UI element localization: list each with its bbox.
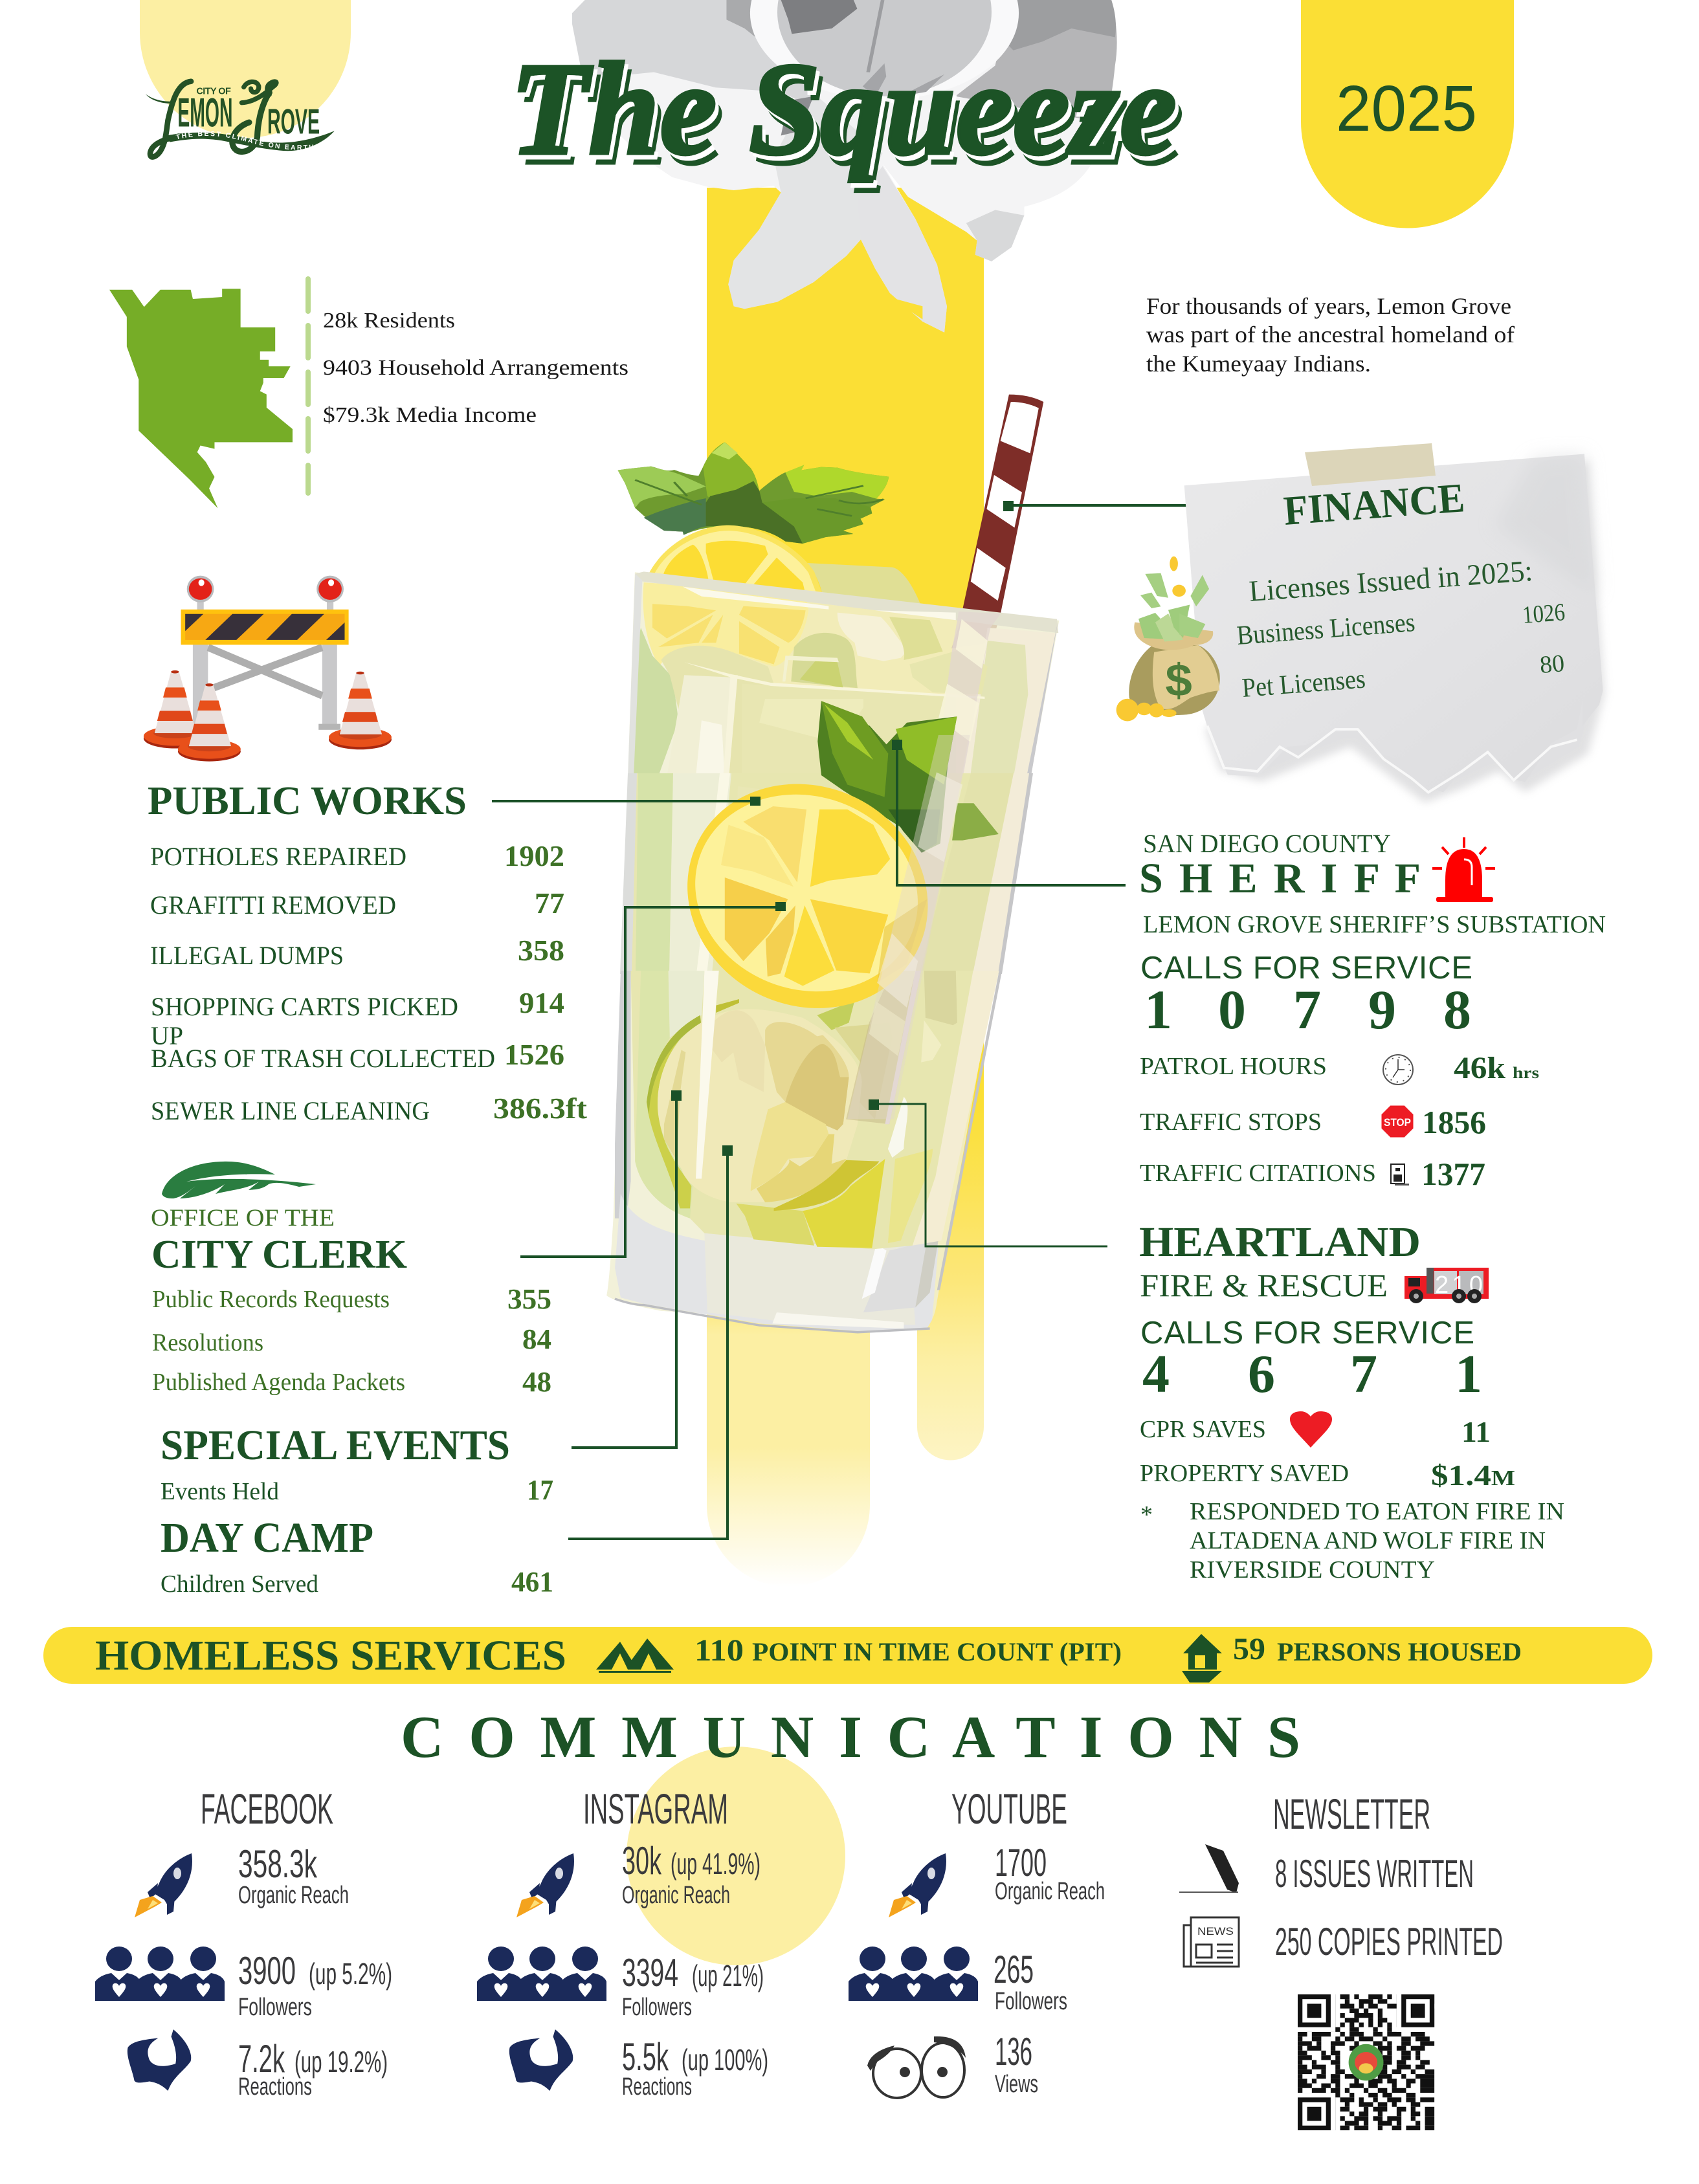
persons housed: 59 (1233, 1632, 1265, 1666)
straw top (951, 395, 1043, 648)
row: children served (161, 1566, 553, 1598)
licenses heading: Licenses Issued in 2025: (1248, 554, 1534, 608)
torn paper note (1184, 454, 1605, 803)
followers: 3900 (238, 1949, 296, 1992)
cpr value: 11 (1461, 1415, 1491, 1448)
finance heading: FINANCE (1282, 474, 1466, 534)
row: sewer line: SEWER LINE CLEANING (151, 1096, 430, 1125)
icon: pen (1179, 1844, 1239, 1893)
followers: (up 21%) (692, 1959, 764, 1992)
followers: Followers (995, 1988, 1067, 2015)
icon: stop sign (1381, 1105, 1414, 1138)
footnote: ALTADENA AND WOLF FIRE IN (1190, 1527, 1546, 1554)
title: The Squeeze (510, 36, 1177, 182)
row: resolutions: Resolutions (152, 1329, 263, 1356)
pet licenses value: 80 (1538, 650, 1566, 679)
lower glass and liquid (615, 971, 1002, 1332)
stats rows: public works (150, 839, 588, 1125)
row: public records: Public Records Requests (152, 1286, 390, 1313)
calls for service label: CALLS FOR SERVICE (1140, 951, 1472, 986)
calls for service number (1144, 978, 1471, 1041)
traffic stops value: 1856 (1422, 1104, 1486, 1140)
row: events held: 17 (527, 1474, 553, 1506)
heading: public works: PUBLIC WORKS (148, 779, 467, 823)
point in time count: 110 (694, 1633, 744, 1668)
panel: public works (144, 576, 588, 1125)
reactions: (up 19.2%) (294, 2045, 388, 2079)
substation: LEMON GROVE SHERIFF’S SUBSTATION (1143, 911, 1606, 938)
calls for service number: 1 (1455, 1344, 1482, 1404)
calls for service label: CALLS FOR SERVICE (1140, 1316, 1474, 1351)
row: events held (161, 1474, 553, 1506)
organic reach: 1700 (995, 1841, 1047, 1884)
intro text: the Kumeyaay Indians. (1146, 351, 1371, 377)
views (995, 2030, 1038, 2098)
cpr saves: CPR SAVES (1140, 1416, 1266, 1443)
demographic stats: 9403 Household Arrangements (323, 356, 628, 380)
organic reach: (up 41.9%) (671, 1847, 761, 1881)
leader line: finance (1003, 501, 1230, 511)
traffic citations value: 1377 (1421, 1156, 1485, 1192)
demographic stats: 28k Residents (323, 309, 455, 333)
row: graffiti: 77 (535, 887, 564, 920)
reactions: 5.5k (622, 2035, 669, 2079)
logo: City of Lemon Grove: THE BEST CLIMATE ON EARTH (175, 131, 313, 150)
row: sewer line: 386.3ft (493, 1092, 588, 1125)
leader line: public works (492, 797, 761, 806)
panel: facebook (95, 1785, 392, 2101)
panel: sheriff (1139, 829, 1606, 1192)
background: central yellow column right (867, 188, 984, 1460)
footnote: * (1140, 1501, 1153, 1528)
organic reach: 358.3k (238, 1842, 318, 1886)
row: events held: Events Held (161, 1478, 279, 1505)
row: graffiti: GRAFITTI REMOVED (150, 890, 396, 920)
icon: people (477, 1947, 606, 2001)
patrol hours value: 46k (1454, 1051, 1505, 1085)
icon: people (95, 1947, 225, 2001)
office of the: OFFICE OF THE (151, 1205, 335, 1231)
reactions: 7.2k (238, 2037, 285, 2080)
patrol hours value: hrs (1513, 1064, 1539, 1082)
icon: house in hand (1182, 1634, 1222, 1682)
calls for service number: 8 (1443, 978, 1471, 1041)
organic reach (238, 1842, 349, 1909)
followers (622, 1951, 764, 2021)
patrol hours value (1454, 1051, 1539, 1085)
organic reach (995, 1841, 1105, 1905)
map of Lemon Grove (109, 289, 293, 508)
panel: special events (161, 1422, 553, 1506)
point in time count: POINT IN TIME COUNT (PIT) (752, 1637, 1122, 1666)
icon: reactions (128, 2029, 191, 2091)
row: potholes: POTHOLES REPAIRED (150, 842, 406, 871)
icon: reactions (509, 2029, 573, 2091)
row: agenda packets (152, 1366, 551, 1398)
lemon slice middle (683, 771, 933, 1021)
icon: clock (1383, 1055, 1413, 1085)
leader line: sheriff (892, 740, 1126, 885)
row: public records: 355 (507, 1283, 551, 1315)
straw inside glass (847, 735, 970, 1119)
property value: $1.4 M (1431, 1459, 1515, 1492)
icon: money bag (1116, 557, 1220, 721)
glass body (606, 572, 1059, 1327)
traffic citations: TRAFFIC CITATIONS (1140, 1160, 1376, 1187)
followers: (up 5.2%) (309, 1957, 392, 1991)
organic reach (622, 1839, 761, 1909)
logo: City of Lemon Grove: EMON (177, 91, 232, 136)
icon: newspaper (1184, 1917, 1239, 1967)
intro text: was part of the ancestral homeland of (1146, 322, 1515, 347)
reactions: Reactions (622, 2073, 692, 2101)
QR code (1298, 1994, 1434, 2130)
calls for service number: 1 (1144, 978, 1172, 1041)
organic reach: Organic Reach (995, 1878, 1105, 1905)
business licenses label: Business Licenses (1236, 608, 1416, 651)
followers (238, 1949, 392, 2021)
row: shopping carts: UP (151, 1021, 183, 1050)
logo: City of Lemon Grove (146, 79, 335, 160)
row: shopping carts: 914 (519, 986, 564, 1019)
organic reach: Organic Reach (238, 1882, 349, 1909)
heading: day camp: DAY CAMP (161, 1514, 373, 1561)
row: children served: 461 (511, 1566, 553, 1598)
leader line: heartland (869, 1099, 1107, 1246)
pet licenses label: Pet Licenses (1241, 664, 1366, 703)
panel: homeless services banner (43, 1627, 1652, 1684)
row: sewer line (151, 1092, 588, 1125)
reactions (622, 2035, 768, 2101)
mint sprig inside (817, 701, 999, 853)
heading: homeless services: HOMELESS SERVICES (95, 1632, 566, 1679)
footnote (1140, 1498, 1564, 1583)
panel: newsletter (1179, 1790, 1503, 2130)
heading: sheriff: S H E R I F F (1139, 855, 1421, 902)
icon: newspaper: NEWS (1197, 1925, 1234, 1937)
logo: City of Lemon Grove: ROVE (267, 102, 320, 141)
row: agenda packets: 48 (522, 1366, 551, 1398)
traffic stops: TRAFFIC STOPS (1140, 1109, 1322, 1136)
demographic stats (323, 309, 628, 427)
row: illegal dumps (150, 934, 564, 970)
followers: 265 (994, 1948, 1034, 1991)
heading: YOUTUBE (951, 1785, 1067, 1833)
calls for service number: 4 (1142, 1344, 1170, 1404)
heading: INSTAGRAM (583, 1785, 728, 1833)
leader line: city clerk (520, 902, 786, 1257)
mint sprig, lemon wedge and ice above the rim (617, 442, 926, 610)
background: pale yellow pill top left (140, 0, 351, 138)
row: shopping carts: SHOPPING CARTS PICKED (151, 992, 458, 1021)
row: resolutions: 84 (522, 1323, 551, 1355)
demographic stats: $79.3k Media Income (323, 403, 537, 427)
copies printed: 250 COPIES PRINTED (1275, 1920, 1503, 1963)
followers (994, 1948, 1067, 2015)
views: Views (995, 2071, 1038, 2098)
icon: stop sign: STOP (1384, 1116, 1411, 1129)
footnote: RESPONDED TO EATON FIRE IN (1190, 1498, 1564, 1525)
intro text (1146, 293, 1515, 377)
calls for service number: 9 (1368, 978, 1396, 1041)
icon: rocket (516, 1853, 574, 1917)
row: illegal dumps: ILLEGAL DUMPS (150, 941, 344, 970)
row: bags of trash: 1526 (504, 1038, 564, 1071)
icon: tents (596, 1638, 674, 1673)
fire and rescue: FIRE & RESCUE (1140, 1267, 1388, 1303)
organic reach: 30k (622, 1839, 662, 1882)
panel: finance (1116, 443, 1605, 803)
leader line: day camp (568, 1145, 733, 1539)
organic reach: Organic Reach (622, 1882, 730, 1909)
heading: special events: SPECIAL EVENTS (161, 1422, 510, 1469)
row: resolutions (152, 1323, 551, 1356)
panel: day camp (161, 1514, 553, 1598)
row: agenda packets: Published Agenda Packets (152, 1369, 405, 1396)
upper glass details (628, 571, 1058, 777)
year: 2025 (1336, 72, 1477, 145)
icon: feather (162, 1162, 316, 1198)
reactions: Reactions (238, 2073, 312, 2101)
intro text: For thousands of years, Lemon Grove (1146, 293, 1511, 319)
background: yellow pill top right (1301, 0, 1514, 228)
panel: instagram (477, 1785, 768, 2101)
logo: City of Lemon Grove: CITY OF (196, 87, 231, 97)
icon: money bag: $ (1165, 655, 1192, 706)
calls for service number: 6 (1248, 1344, 1275, 1404)
reactions (238, 2037, 388, 2101)
row: bags of trash: BAGS OF TRASH COLLECTED (151, 1044, 495, 1073)
icon: people (849, 1947, 978, 2001)
icon: fire truck: 210 (1435, 1272, 1483, 1299)
calls for service number: 0 (1218, 978, 1246, 1041)
san diego county: SAN DIEGO COUNTY (1143, 829, 1391, 858)
icon: fire truck (1405, 1268, 1489, 1303)
background: central yellow column left (707, 188, 870, 1587)
panel: youtube (849, 1785, 1105, 2098)
row: public records (152, 1283, 551, 1315)
row: graffiti (150, 887, 564, 920)
persons housed (1233, 1632, 1522, 1666)
row: illegal dumps: 358 (518, 934, 564, 967)
followers: Followers (238, 1994, 312, 2021)
panel: heartland fire (1139, 1219, 1564, 1583)
calls for service number: 7 (1350, 1344, 1377, 1404)
lemonade glass illustration (606, 395, 1059, 1332)
issues written: 8 ISSUES WRITTEN (1275, 1852, 1474, 1895)
icon: siren (1432, 837, 1495, 902)
patrol hours: PATROL HOURS (1140, 1053, 1327, 1080)
background: pale circle behind communications (627, 1747, 845, 1965)
followers: 3394 (622, 1951, 678, 1994)
calls for service number (1142, 1344, 1482, 1404)
views: 136 (995, 2030, 1032, 2073)
row: shopping carts (151, 986, 564, 1050)
property saved: PROPERTY SAVED (1140, 1460, 1349, 1487)
icon: road barrier with cones (144, 576, 392, 762)
business licenses value: 1026 (1521, 599, 1566, 629)
dashed divider (305, 279, 311, 493)
lemon slice and blossom illustration (572, 0, 1117, 333)
reactions: (up 100%) (682, 2043, 768, 2077)
heading: FACEBOOK (201, 1785, 333, 1833)
icon: heart (1290, 1411, 1332, 1448)
followers: Followers (622, 1994, 692, 2021)
heading: heartland: HEARTLAND (1139, 1219, 1421, 1266)
footnote: RIVERSIDE COUNTY (1190, 1556, 1435, 1583)
heading: NEWSLETTER (1273, 1790, 1430, 1838)
row: children served: Children Served (161, 1571, 318, 1598)
icon: rocket (889, 1853, 946, 1917)
middle glass filler (620, 773, 1033, 974)
row: potholes: 1902 (504, 839, 564, 872)
tape (1305, 443, 1436, 486)
row: potholes (150, 839, 564, 872)
icon: eyes (867, 2036, 966, 2098)
leader line: special events (572, 1090, 682, 1448)
panel: city clerk (151, 1162, 551, 1398)
heading: city clerk: CITY CLERK (151, 1233, 407, 1277)
persons housed: PERSONS HOUSED (1277, 1637, 1522, 1666)
calls for service number: 7 (1293, 978, 1321, 1041)
heading: communications: C O M M U N I C A T I O N S (401, 1704, 1300, 1770)
icon: citation ticket (1391, 1164, 1409, 1186)
icon: rocket (135, 1853, 192, 1917)
